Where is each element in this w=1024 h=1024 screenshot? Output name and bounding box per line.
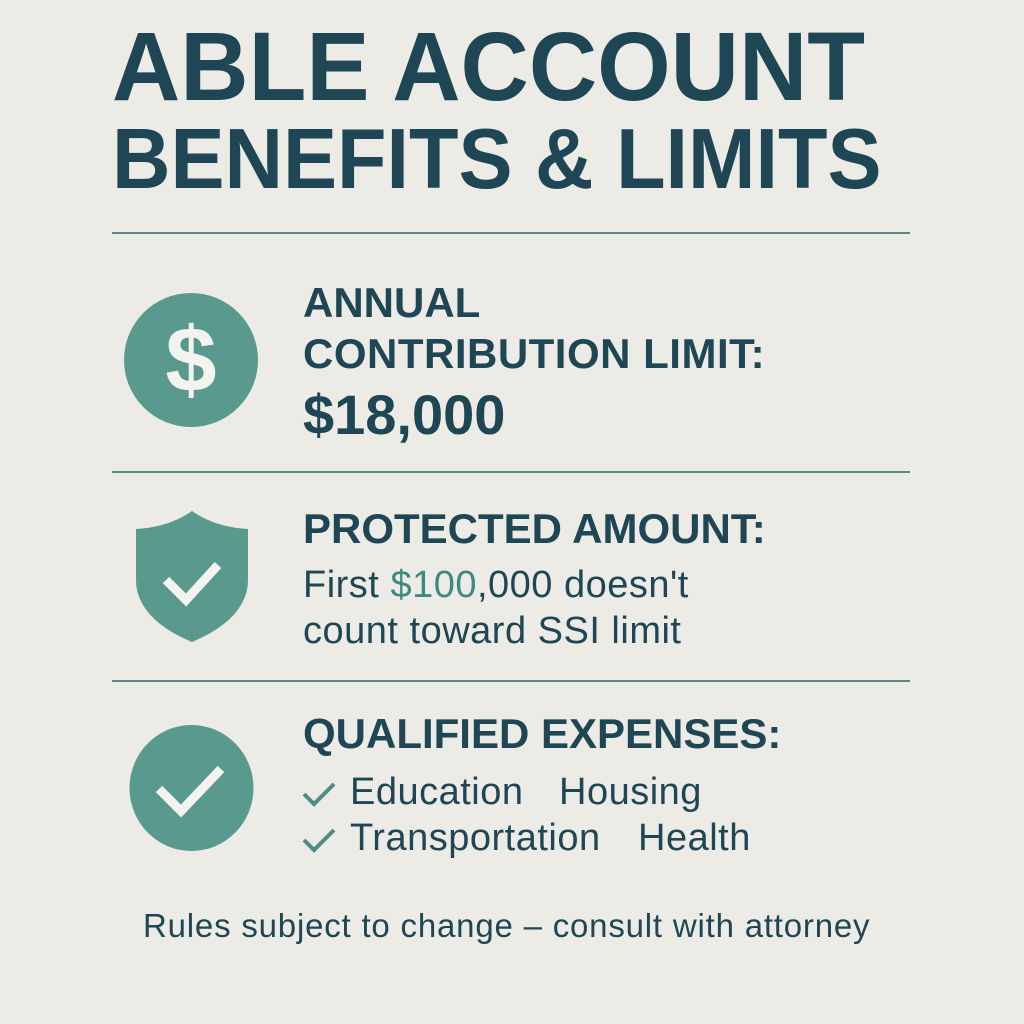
icon: check circle <box>130 725 254 851</box>
text: qualified expenses: Transportation <box>350 817 601 859</box>
title: ABLE ACCOUNT <box>112 12 865 121</box>
text: contribution limit: $18,000 <box>303 383 505 446</box>
icon: shield <box>136 511 248 642</box>
text: qualified expenses: QUALIFIED EXPENSES: <box>303 710 781 757</box>
icon: dollar <box>124 293 258 427</box>
text: qualified expenses: Education <box>350 771 524 813</box>
title: BENEFITS & LIMITS <box>112 112 882 207</box>
text: protected amount <box>303 505 766 652</box>
text: qualified expenses <box>302 710 781 859</box>
text: protected amount: count toward SSI limit <box>303 610 681 652</box>
icon: dollar: $ <box>165 309 217 411</box>
text: protected amount: PROTECTED AMOUNT: <box>303 505 766 552</box>
footer note: Rules subject to change – consult with attorney <box>143 907 870 944</box>
text: contribution limit <box>303 279 765 446</box>
text: qualified expenses: Housing <box>559 771 702 813</box>
title <box>112 12 882 207</box>
text: contribution limit: CONTRIBUTION LIMIT: <box>303 330 765 377</box>
text: qualified expenses: Health <box>638 817 751 859</box>
text: protected amount: First $100,000 doesn't <box>303 564 689 606</box>
text: contribution limit: ANNUAL <box>303 279 480 326</box>
